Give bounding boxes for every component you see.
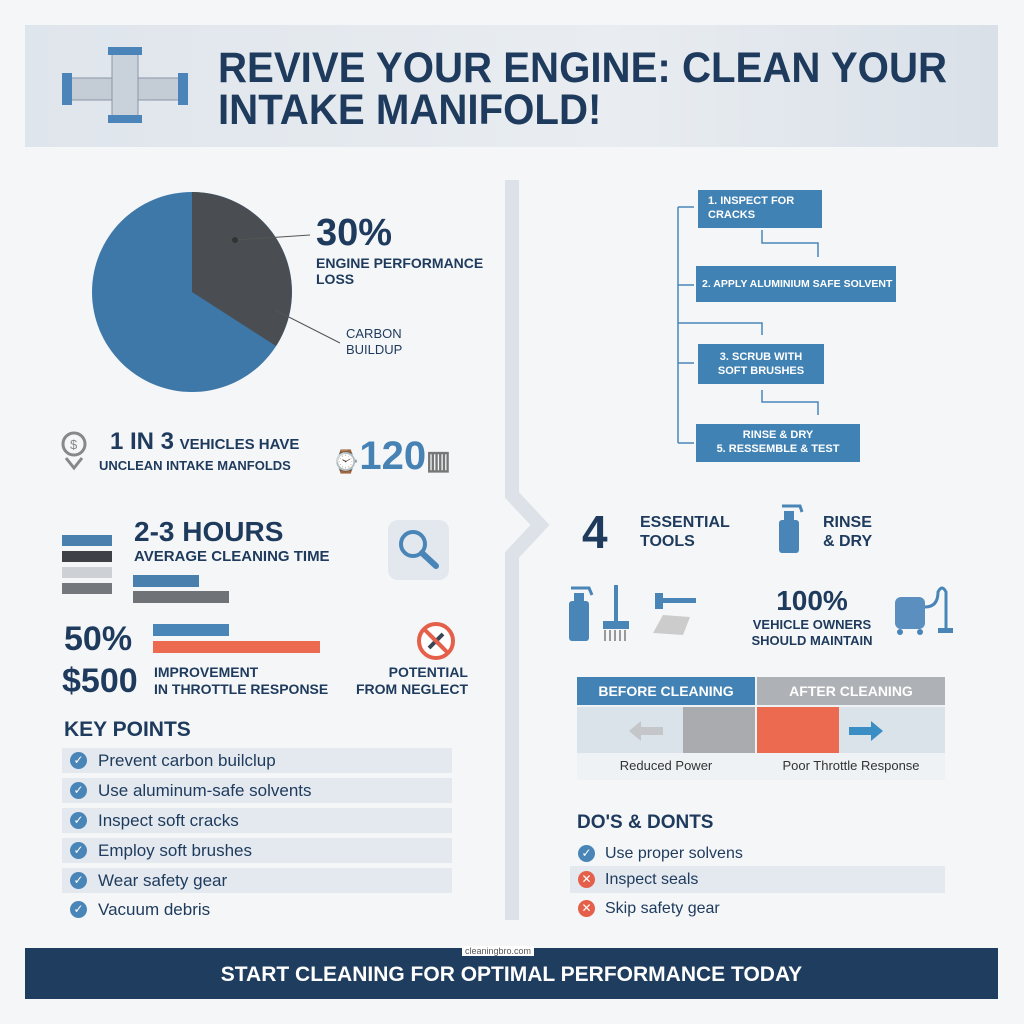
- do's and donts: ✓: [581, 846, 592, 860]
- key points: Vacuum debris: [98, 900, 210, 919]
- icon: tools: [569, 585, 696, 641]
- do's and donts: DO'S & DONTS: [577, 812, 713, 833]
- title: REVIVE YOUR ENGINE: CLEAN YOUR: [218, 44, 947, 92]
- flowchart: CRACKS: [708, 209, 755, 221]
- label: carbon buildup: BUILDUP: [346, 342, 402, 357]
- stat: 1 in 3: [62, 428, 299, 473]
- stat: 1 in 3: $: [70, 437, 78, 452]
- stat: 50% / $500: $500: [62, 662, 138, 700]
- text: potential from neglect: [356, 664, 468, 697]
- label: carbon buildup: [346, 326, 402, 357]
- key points: Employ soft brushes: [98, 841, 252, 860]
- title: [218, 44, 947, 134]
- stat: 1 in 3: UNCLEAN INTAKE MANFOLDS: [99, 458, 291, 473]
- text: rinse & dry: & DRY: [823, 533, 872, 550]
- label: carbon buildup: CARBON: [346, 326, 402, 341]
- stat: 2-3 hours: AVERAGE CLEANING TIME: [134, 548, 330, 565]
- do's and donts: [570, 812, 945, 917]
- key points: Prevent carbon builclup: [98, 751, 276, 770]
- do's and donts: ✕: [581, 901, 592, 915]
- stat: 4 essential tools: [582, 506, 730, 558]
- stat: 4 essential tools: 4: [582, 506, 608, 558]
- key points: ✓: [73, 873, 84, 887]
- flowchart: RINSE & DRY: [743, 429, 813, 441]
- key points: KEY POINTS: [64, 718, 191, 741]
- stat: 30%: [316, 212, 483, 287]
- do's and donts: Skip safety gear: [605, 900, 720, 917]
- stat: 100%: VEHICLE OWNERS: [753, 617, 871, 632]
- icon: no tools: [417, 622, 455, 660]
- stat: 30%: 30%: [316, 212, 392, 254]
- stat: 50% / $500: 50%: [64, 620, 132, 658]
- do's and donts: Inspect seals: [605, 871, 698, 888]
- text: potential from neglect: FROM NEGLECT: [356, 681, 468, 697]
- key points: [62, 718, 452, 919]
- before/after table: Reduced Power: [620, 758, 712, 773]
- key points: Inspect soft cracks: [98, 811, 239, 830]
- key points: ✓: [73, 843, 84, 857]
- footer banner: START CLEANING FOR OPTIMAL PERFORMANCE TODAY: [221, 963, 802, 986]
- flowchart: 2. APPLY ALUMINIUM SAFE SOLVENT: [702, 278, 892, 290]
- watermark: cleaningbro.com: [465, 946, 531, 956]
- header: [25, 25, 998, 147]
- stat: 4 essential tools: TOOLS: [640, 533, 695, 550]
- before/after table: Poor Throttle Response: [782, 758, 920, 773]
- stat: 50% / $500: IN THROTTLE RESPONSE: [154, 681, 328, 697]
- pie chart: [92, 192, 292, 392]
- key points: ✓: [73, 813, 84, 827]
- stat: 1 in 3: 1 IN 3 VEHICLES HAVE: [110, 428, 299, 455]
- stat: 50% / $500: [62, 620, 328, 700]
- do's and donts: Use proper solvens: [605, 845, 743, 862]
- stat: 30%: ENGINE PERFORMANCE: [316, 255, 483, 271]
- stat: 30%: LOSS: [316, 271, 354, 287]
- stat: 2-3 hours: 2-3 HOURS: [134, 516, 283, 547]
- do's and donts: ✕: [581, 872, 592, 886]
- flowchart: 1. INSPECT FOR: [708, 195, 794, 207]
- flowchart: 5. RESSEMBLE & TEST: [717, 443, 839, 455]
- divider: [505, 180, 550, 920]
- flowchart: [677, 190, 896, 462]
- stat: 100%: SHOULD MAINTAIN: [751, 633, 873, 648]
- key points: ✓: [73, 783, 84, 797]
- before/after table: BEFORE CLEANING: [598, 683, 734, 699]
- stat: 50% / $500: IMPROVEMENT: [154, 664, 258, 680]
- stat: 100%: 100%: [776, 585, 848, 616]
- key points: ✓: [73, 753, 84, 767]
- text: rinse & dry: RINSE: [823, 514, 872, 531]
- icon: magnifier: [388, 520, 449, 580]
- flowchart: SOFT BRUSHES: [718, 365, 804, 377]
- stat: 2-3 hours: [62, 516, 330, 603]
- icon: pipe: [62, 47, 188, 123]
- title: INTAKE MANIFOLD!: [218, 86, 601, 134]
- icon: vacuum: [895, 586, 953, 635]
- before/after table: AFTER CLEANING: [789, 683, 913, 699]
- stat: 100%: [751, 585, 873, 648]
- text: potential from neglect: POTENTIAL: [389, 664, 468, 680]
- icon: spray bottle: [779, 504, 804, 553]
- key points: Use aluminum-safe solvents: [98, 781, 312, 800]
- text: rinse & dry: [823, 514, 872, 550]
- key points: Wear safety gear: [98, 871, 227, 890]
- flowchart: 3. SCRUB WITH: [720, 351, 802, 363]
- before/after table: [577, 677, 945, 780]
- stat: 4 essential tools: ESSENTIAL: [640, 514, 730, 531]
- key points: ✓: [73, 902, 84, 916]
- footer banner: [25, 948, 998, 999]
- stat: 120: ⌚120▥: [332, 434, 451, 478]
